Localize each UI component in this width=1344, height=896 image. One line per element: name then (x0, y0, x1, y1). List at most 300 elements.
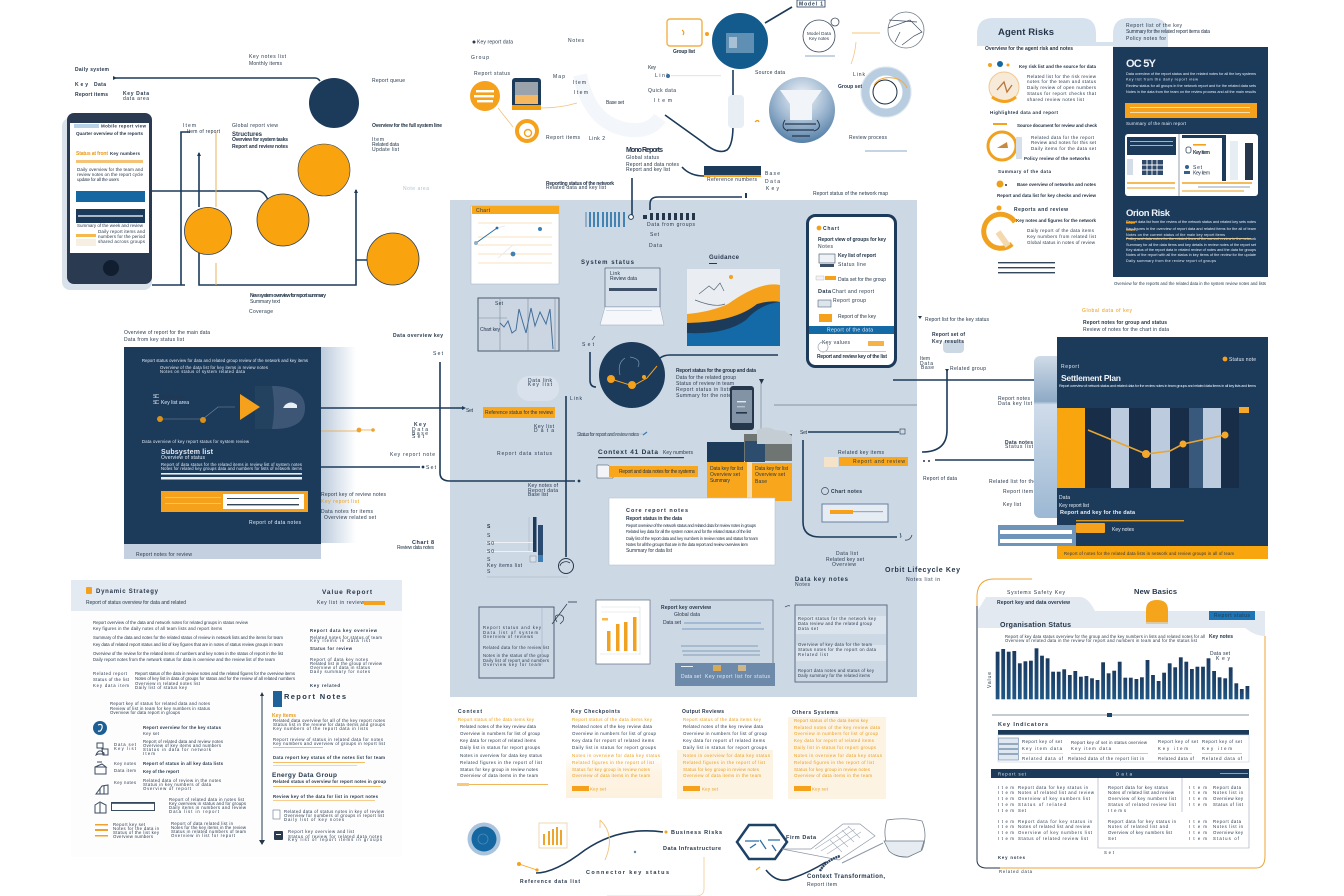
labels: between centre and right panel: Data (920, 361, 933, 367)
footer text: Report and key for the data (1060, 510, 1136, 516)
landscape card: Guidance (709, 255, 740, 261)
panel: right navy chart (998, 337, 1268, 559)
column 3: Overview in numbers for list of group (683, 731, 768, 736)
lower table: Overview key (1213, 830, 1244, 835)
small node link: Key list area (161, 400, 189, 406)
mini bar chart: S (487, 533, 491, 539)
navy report panel: Data overview of the report status and the related notes for all the key systems (1126, 72, 1256, 76)
title: Status note (1229, 357, 1256, 363)
right column: Related notes for status of team (310, 635, 382, 640)
icon list: Daily items in numbers and review (169, 805, 247, 810)
labels: Item (574, 90, 588, 96)
framed table: right: Daily summary for the related items (798, 673, 870, 678)
icon list: Key notes (114, 780, 136, 785)
side fade (321, 347, 356, 543)
navy report panel: Summary for all the data items and key details in review notes of the report set (1126, 243, 1257, 247)
labels: Update list (372, 147, 400, 153)
bubble label: Data link (528, 378, 552, 384)
body text: Report key of status for related data and notes (110, 701, 210, 706)
footer note: Report of data notes (249, 520, 302, 526)
embedded dashboard card (1125, 134, 1258, 196)
lower table: Report data (1213, 785, 1242, 790)
column 3: Key set (702, 786, 719, 792)
column 2: Overview of data items in the team (572, 773, 650, 778)
icon: navy base strip: Key (766, 186, 780, 192)
lower table: Item (998, 796, 1014, 801)
heading: right of panel: Orbit Lifecycle Key (885, 567, 960, 574)
panel: bottom right bar chart document (977, 579, 1265, 874)
orange label strip: Key list (534, 424, 555, 430)
phone illustration: Daily overview for the team and (77, 167, 143, 172)
summary strip: Key item (1158, 746, 1188, 751)
frame (977, 579, 1265, 868)
footer text: Data (1059, 495, 1070, 501)
icon: navy base strip: Reference numbers (707, 177, 758, 183)
left column: Status for report checks that (1027, 91, 1097, 96)
labels: Report status (474, 71, 510, 77)
lower table: Item (998, 836, 1014, 841)
icon list: Status in data for network (143, 747, 212, 752)
lower table: Notes of related list and (1108, 824, 1169, 829)
icon: navy base strip: Data (765, 179, 780, 185)
column 2 (571, 709, 661, 792)
left column: Report and data list for key checks and review (997, 193, 1096, 198)
icon list: Report of data related list in (171, 821, 234, 826)
column 1: Context (458, 709, 482, 715)
heading: report status (597, 449, 698, 478)
body text: Report status of the data in review notes and the related figures for the overview items (135, 671, 295, 676)
header: Key list in review (317, 600, 364, 606)
column 3: Related notes of the key review data (683, 724, 764, 729)
summary strip: Key item data (1071, 746, 1112, 751)
labels: Key (75, 82, 88, 88)
right side extensions: Review data notes (397, 545, 434, 551)
right side extensions: Base (412, 431, 428, 437)
note line: Key notes (1209, 634, 1233, 640)
labels: Key notes list (249, 54, 287, 60)
left column: Related data for the report (1031, 135, 1095, 140)
lower table: Status of related (1018, 802, 1067, 807)
summary strip: Key item (1202, 746, 1232, 751)
notes under callouts: Overview (832, 562, 856, 568)
embedded dashboard card: Key item (1193, 170, 1210, 176)
white text card: Summary for data list (626, 548, 673, 554)
note with arrow: Status for report and review notes (577, 432, 640, 438)
sub heading (161, 449, 302, 480)
framed table: left: Report status and key (483, 625, 542, 630)
left column: Key notes and figures for the network (1016, 218, 1096, 223)
panel: phone and circle flow (62, 54, 442, 315)
keyboard line art (756, 824, 883, 880)
lower table: Set (1018, 808, 1027, 813)
photo block and orange panels: Data key for list (710, 466, 744, 472)
framed table: right: Report data notes and status of key (798, 668, 875, 673)
mini bar chart: S (487, 569, 491, 575)
summary strip: Related data of (1202, 756, 1243, 761)
right lower column: Daily list of key notes (284, 817, 344, 822)
body text: Overview of the review for the related items of numbers and key notes in the status of report in the list (93, 651, 284, 656)
white text card: Report status in the data (626, 516, 682, 522)
column 4: Notes in overview for data key status (794, 753, 883, 758)
text block near phone: Report status in lists (676, 387, 732, 393)
column 1: Related notes of the key review data (460, 724, 537, 729)
column tints (566, 717, 886, 799)
footer text: Key report list (1059, 503, 1090, 509)
right lower column: Report review of status in related data for notes (273, 737, 383, 742)
lower table: Status of list (1213, 802, 1244, 807)
lower table: Item (998, 819, 1014, 824)
left column: Base overview of networks and notes (1017, 182, 1096, 187)
phone illustration: Mobile report view (101, 124, 146, 128)
icon: people (96, 743, 108, 755)
panel: right top report (977, 18, 1268, 286)
laptop: System status (581, 260, 635, 266)
body text: Status of the list (93, 677, 130, 682)
icon: navy base strip (682, 166, 780, 192)
lower table: Set (1104, 850, 1115, 855)
labels: Report and review notes (232, 144, 288, 150)
icon list (93, 721, 247, 839)
framed table: left (479, 602, 577, 678)
body text: Review of list in team for key numbers in status (110, 706, 210, 711)
left column: Daily report of the data items (1027, 228, 1095, 233)
keyboard line art: Firm Data (786, 835, 817, 841)
labels: Key report data (477, 40, 513, 46)
heading: report status: Context 41 Data (598, 449, 658, 456)
navy report panel: Summary of the main report (1126, 121, 1187, 126)
column 2: Key set (590, 786, 607, 792)
blue stripe chart (586, 212, 624, 227)
labels: Data (94, 82, 106, 88)
lower table: Report data for key status in (1018, 819, 1093, 824)
header (71, 580, 402, 611)
summary strip: Related data of (1158, 756, 1195, 761)
left column: Review and notes for this set (1031, 140, 1097, 145)
title: Report overview of network status and related data for the review notes in team groups and related data items in all key lists and items (1059, 384, 1256, 388)
callouts on right side: Chart notes (831, 489, 862, 495)
note line: Value (987, 672, 993, 688)
labels: between centre and right panel: Report item (1003, 489, 1033, 495)
right column (310, 628, 383, 688)
labels: Report items (546, 135, 580, 141)
callouts on right side (822, 450, 908, 522)
icon list: Data item (114, 768, 136, 773)
body text: Key figures in the daily notes of all team lists and report items (93, 626, 222, 631)
icon list: Notes for the data in (113, 826, 160, 831)
mini bar chart: Base list (528, 492, 549, 498)
phone card: Report of the key (838, 314, 876, 320)
body text: Overview for data report in groups (110, 710, 180, 715)
label: network map: Report status of the network map (813, 191, 888, 197)
circle nodes (184, 78, 419, 285)
header band: Systems Safety Key (1007, 590, 1066, 596)
labels (471, 38, 907, 173)
icon list: Report overview for the key status (143, 725, 222, 730)
white text card: Related key data for all the system notes and for the related status of the list (626, 529, 752, 534)
lower table: Item (1189, 796, 1207, 801)
lower table: Item (998, 802, 1014, 807)
framed table: left: Notes in the status of the group (483, 653, 550, 658)
photo block and orange panels: Summary (710, 478, 730, 484)
labels: Quick data (648, 88, 676, 94)
right side extensions (321, 333, 466, 551)
labels: Note area (403, 186, 429, 192)
labels: Base set (606, 100, 625, 106)
icon row: Data (649, 243, 662, 249)
column 4: Key set (812, 786, 829, 792)
navy connector from top (629, 178, 747, 219)
line series (1088, 407, 1249, 458)
labels: Notes (568, 38, 584, 44)
notes: Report list of the key (1126, 23, 1182, 29)
heading: report status: Report and data notes for the systems (619, 469, 696, 475)
column 4: Status for key group in review notes (794, 767, 871, 772)
labels: Map (553, 74, 565, 80)
labels: Item of report (187, 129, 221, 135)
left column: Daily review of open numbers (1027, 85, 1097, 90)
framed table: middle: Report key overview (661, 605, 711, 611)
labels: Link (655, 73, 670, 79)
small phone (730, 379, 764, 431)
icon list: Key set (143, 731, 160, 736)
right lower column (272, 691, 386, 842)
right curved connector: Set (800, 430, 808, 436)
navy background (124, 347, 321, 544)
framed table: right: Status notes for the report on data (798, 647, 877, 652)
left column: Policy review of the networks (1024, 156, 1090, 161)
left column: shared review notes list (1027, 97, 1085, 102)
intro text (124, 330, 210, 343)
right lower column: Key numbers and overview of groups in report list (273, 741, 386, 746)
labels: Report and data notes (626, 162, 680, 168)
navy report panel: Notes on the current status of the main key report items (1126, 233, 1225, 237)
phone card: Status line (838, 262, 866, 268)
bubble label (517, 376, 582, 402)
labels: Source data (755, 70, 785, 76)
notes under callouts: Data list (836, 551, 859, 557)
double arrow (259, 692, 265, 845)
right lower column: Overview for numbers of groups in report list (284, 813, 385, 818)
icon: segmented ring: Link (853, 72, 866, 78)
icon row: Set (650, 232, 660, 238)
line chart: Chart key (480, 327, 500, 333)
column 2: Overview in numbers for list of group (572, 731, 657, 736)
header band: Report status (1214, 613, 1250, 619)
framed table: middle: Key report list for status (705, 674, 770, 680)
icon list: Data set (114, 742, 137, 747)
column 2: Notes in overview for data key status (572, 753, 661, 758)
labels: Report queue (372, 78, 405, 84)
labels: Group (471, 55, 489, 61)
right side extensions: Overview related set (324, 515, 377, 521)
icon list: Overview numbers (113, 834, 153, 839)
icon list: Status in related numbers of team (171, 829, 246, 834)
framed table: left: Daily list of report and numbers (483, 658, 549, 663)
footer text: Report of notes for the related data lists in network and review groups in all of team (1064, 551, 1234, 556)
connector lines (498, 103, 577, 127)
labels: Connector key status (586, 870, 669, 876)
summary strip: Report key of set in status overview (1071, 740, 1148, 745)
body text: Report overview of the data and network notes for related groups in status review (93, 620, 249, 625)
phone illustration: review notes on the report cycle (77, 172, 143, 177)
header: Report of status overview for data and related (86, 600, 186, 606)
left column: Related list for the risk review (1027, 74, 1097, 79)
note line (987, 634, 1233, 688)
small node link (153, 394, 235, 423)
labels: between centre and right panel: Report notes for group and status (1083, 320, 1167, 326)
column 2: Daily list in status for report groups (572, 745, 657, 750)
labels: between centre and right panel: Global data of key (1082, 308, 1132, 314)
body text: Key data of related report status and list of key figures that are in notes of status review groups in team (93, 642, 283, 647)
lower table: Item (1189, 824, 1207, 829)
phone card: Notes (818, 244, 834, 250)
icon: large blue circle (712, 0, 825, 69)
white text card: Notes for all the groups that are in the data report and review overview item (626, 542, 748, 547)
icon list: Data list in report (169, 809, 220, 814)
orange header card: Chart (476, 208, 491, 214)
column 4: Related notes of the key review data (794, 725, 881, 730)
column 4: Daily list in status for report groups (794, 745, 877, 750)
lower table: Notes list in (1213, 824, 1244, 829)
node capsule (728, 95, 744, 128)
phone card: Report view of groups for key (818, 237, 886, 243)
header: Value Report (322, 589, 373, 596)
framed table: right: Data set (798, 626, 819, 631)
header: Dynamic Strategy (96, 589, 159, 595)
column 4: Related figures in the report of list (794, 760, 875, 765)
caption: Overview for the reports and the related data in the system review notes and lists (1114, 281, 1266, 286)
light footer (124, 544, 321, 559)
mini bar chart: S (487, 557, 491, 563)
panel intro (142, 358, 308, 374)
lower table: Data (1116, 772, 1133, 776)
right lower column: Related data of status notes in key of review (284, 809, 385, 814)
lower table: Overview key (1213, 796, 1244, 801)
lower table: Item (1189, 836, 1207, 841)
labels: between centre and right panel: Related list for the data (989, 479, 1049, 485)
column 4: Overview of data items in the team (794, 773, 872, 778)
lower table: Report data for key status in (1108, 819, 1177, 824)
summary strip (998, 722, 1249, 762)
line chart (478, 298, 559, 351)
icon list: Status in key numbers of data (143, 782, 212, 787)
lower table: Report set (998, 772, 1027, 776)
header band: Report key and data overview (997, 600, 1070, 606)
labels: Related data (372, 142, 399, 148)
left column: Daily items for the data set (1031, 146, 1097, 151)
framed table: right: Report status for the network key (798, 616, 877, 621)
icon: navy base strip: Base (765, 171, 780, 177)
right column: Status for review (310, 646, 353, 651)
left column: Key risk list and the source for data (1019, 64, 1096, 69)
navy report panel: Key figures in the overview of report data and related items for the all of team (1126, 227, 1256, 231)
label box (112, 802, 154, 810)
icon row: Data from groups (647, 222, 696, 228)
header band (978, 587, 1265, 636)
lower table: Item (1189, 819, 1207, 824)
left column: Source document for review and check (1017, 123, 1097, 128)
lower table: Notes of related list and review (1108, 790, 1175, 795)
right side extensions: Chart 8 (412, 540, 434, 546)
labels: between centre and right panel: Report list for the key status (925, 317, 990, 323)
orange label strip: Report data status (497, 451, 552, 457)
photo block and orange panels: Overview set (755, 472, 786, 478)
side tint (1034, 356, 1064, 518)
right lower column: Key numbers of the report data in lists (273, 726, 368, 731)
navy background (1057, 337, 1268, 559)
callouts on right side: Report and review (853, 459, 905, 465)
column 3: Overview of data items in the team (683, 773, 761, 778)
labels: Coverage (249, 309, 273, 315)
notes: Overview for the agent risk and notes (985, 46, 1073, 52)
phone illustration: Daily report items and (98, 229, 145, 234)
body text (93, 620, 295, 715)
panel: navy left report (124, 330, 466, 559)
panel: bottom left document (71, 580, 402, 857)
photo block and orange panels: Data key for list (755, 466, 789, 472)
phone card: Report group (833, 298, 866, 304)
column 1: Status for key group in review notes (460, 767, 539, 772)
framed table: left: Data list of system (483, 630, 538, 635)
column 4: Key data for report of related items (794, 738, 875, 743)
labels: between centre and right panel: Base (921, 365, 934, 371)
labels: Overview for system tasks (232, 137, 288, 143)
text block near phone: Data for the related group (676, 375, 736, 381)
column 3: Status for key group in review notes (683, 767, 760, 772)
right column: Report of data key notes (310, 657, 368, 662)
labels: between centre and right panel (918, 308, 1169, 508)
right column: Key related (310, 683, 340, 688)
icon list: Item (143, 751, 155, 756)
orange header card (471, 206, 559, 284)
lower table: Status of (1213, 836, 1240, 841)
left column: notes for the team and status (1027, 79, 1097, 84)
phone illustration: Key numbers (110, 151, 140, 156)
lower table: Item (998, 785, 1014, 790)
divider note: Data overview of key report status for system review (142, 439, 250, 444)
right side extensions: Set (412, 434, 425, 440)
notes under callouts: Notes (795, 582, 810, 588)
right column: Overview of data in status (310, 665, 370, 670)
labels: Report items (75, 92, 108, 98)
icon list: Related data of review in the notes (143, 778, 221, 783)
lower table: Notes of related list and review (1018, 824, 1091, 829)
lower table: Items (1108, 808, 1126, 813)
right side extensions: Key (414, 422, 426, 428)
icon: orange outline box (667, 19, 709, 46)
body text: Key data item (93, 683, 129, 688)
mini bar chart: S0 (487, 541, 494, 547)
icon list: Report of related data in notes list (169, 797, 245, 802)
panel: central hub background (450, 200, 917, 697)
icon: dark device box (512, 78, 541, 110)
right curved connector (800, 429, 912, 540)
panel intro: Notes on status of system related data (160, 369, 246, 374)
text block near phone: Report status for the group and data (676, 368, 756, 374)
lower table: Report data for key status (1108, 785, 1168, 790)
label: network status: Reporting status of the network (546, 181, 614, 187)
title: Report (1061, 364, 1080, 370)
navy report panel: Review status for all groups in the network report and for the related data sets (1126, 84, 1256, 88)
white text card: Core report notes (626, 508, 688, 514)
lower table (991, 769, 1249, 874)
navy network circle (582, 336, 778, 408)
mini bar chart: Key items list (487, 563, 523, 569)
summary strip: Related data of the report list in (1068, 756, 1145, 761)
right column: Related list in the group of review (310, 661, 383, 666)
column 2: Related figures in the report of list (572, 760, 655, 765)
icon list: Status of the list key (113, 830, 160, 835)
